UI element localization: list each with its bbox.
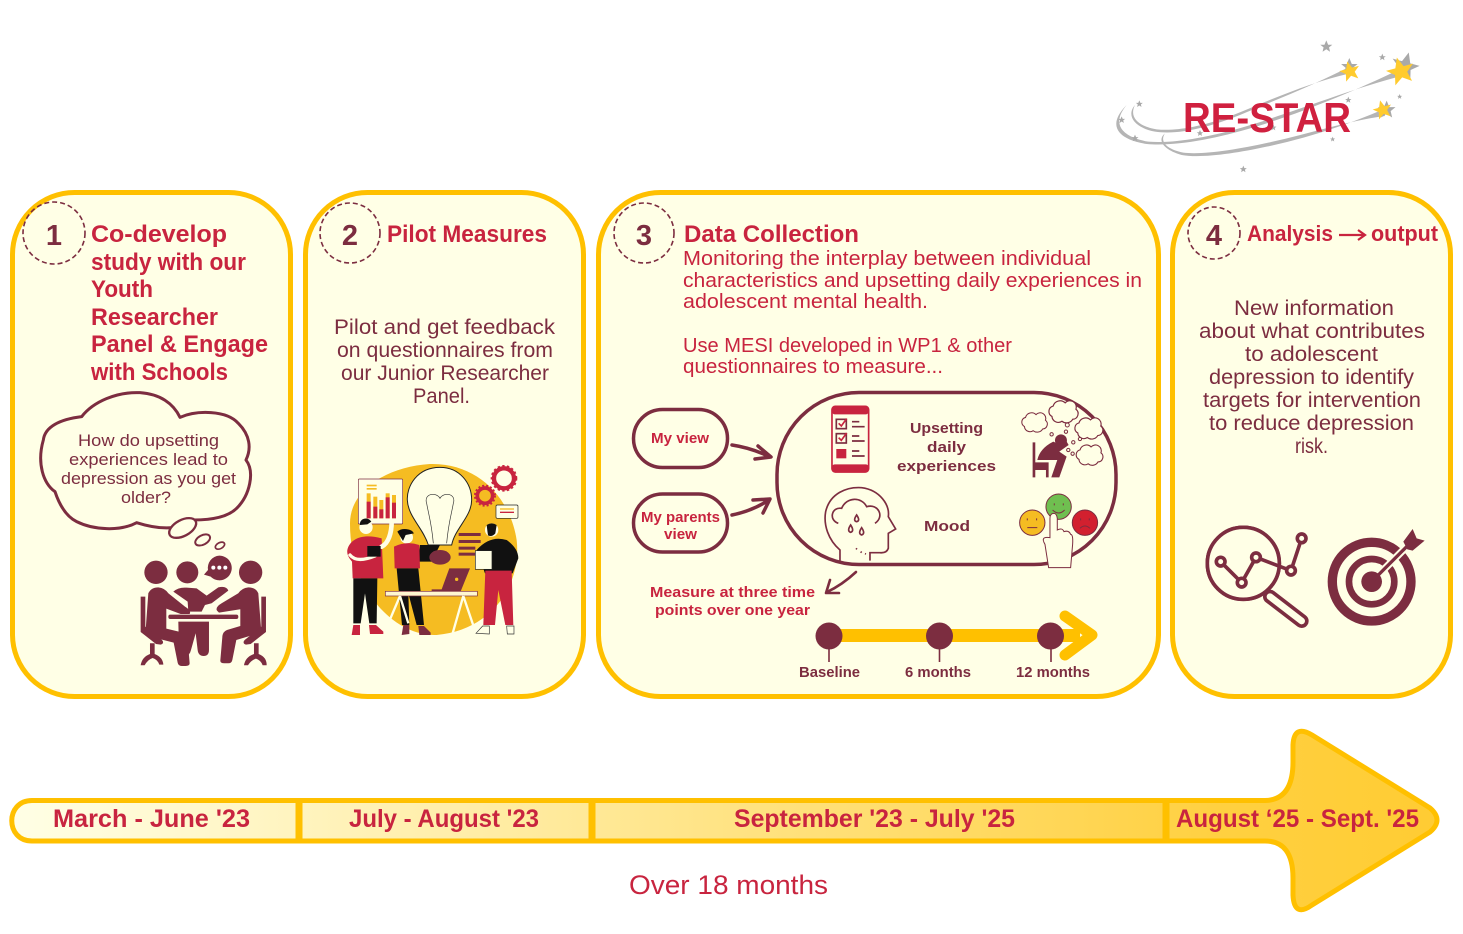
timeline: baseline to 12 months: 12 months — [1016, 664, 1090, 681]
heading: co-develop: study with our — [91, 249, 246, 276]
logo: RE-STAR: RE-STAR — [1183, 94, 1351, 141]
measure at three time points label — [650, 584, 815, 619]
pill: my parents view — [634, 494, 728, 552]
thought bubble — [41, 393, 251, 551]
phase: September '23 - July '25: September '23 - July '25 — [734, 805, 1015, 833]
thought bubble: experiences lead to — [69, 450, 228, 469]
arrow: my view to measures — [732, 445, 771, 459]
heading: co-develop: Youth — [91, 276, 153, 303]
logo: RE-STAR — [1116, 40, 1422, 172]
step number 3 — [614, 203, 674, 263]
pill: my view — [634, 410, 728, 468]
icon: phone checklist — [832, 406, 869, 472]
analysis description: targets for intervention — [1203, 389, 1421, 412]
heading: analysis to output: Analysis — [1247, 221, 1333, 246]
timeline: baseline to 12 months — [799, 616, 1092, 681]
label: mood: Mood — [924, 518, 970, 535]
heading: co-develop: Panel & Engage — [91, 331, 268, 358]
analysis description: risk. — [1295, 435, 1328, 458]
label: upsetting daily experiences: daily — [927, 439, 967, 456]
pill: my parents view: My parents — [641, 509, 720, 526]
heading: co-develop: Co-develop — [91, 221, 227, 248]
data collection description: Monitoring the interplay between individual — [683, 248, 1091, 270]
heading: co-develop — [90, 221, 268, 386]
panel 1: co-develop — [12, 192, 290, 696]
analysis description: New information — [1234, 297, 1394, 320]
data collection description: Use MESI developed in WP1 & other — [683, 335, 1012, 357]
analysis description: depression to identify — [1209, 366, 1415, 389]
icon: magnifier with line chart — [1207, 527, 1306, 621]
analysis description: about what contributes — [1199, 320, 1425, 343]
phase: August '25 - Sept. '25: August ‘25 - Sept. '25 — [1176, 805, 1419, 833]
thought bubble: depression as you get — [61, 469, 236, 488]
pilot description: our Junior Researcher — [341, 362, 549, 385]
heading: analysis to output: output — [1371, 221, 1439, 246]
pilot description: Pilot and get feedback — [334, 316, 556, 339]
step number 1: 1 — [46, 220, 62, 252]
icon: target with arrow — [1332, 529, 1425, 621]
arrow: measures to time points — [826, 572, 856, 593]
arrow: my parents view to measures — [732, 499, 770, 515]
thought bubble: older? — [121, 488, 171, 507]
pill: my parents view: view — [664, 526, 697, 543]
panel 3: data collection — [598, 192, 1158, 696]
thought bubble: How do upsetting — [78, 431, 219, 450]
icon: person worrying with thought clouds — [1022, 401, 1103, 477]
dividers between phases — [299, 800, 1166, 841]
analysis description — [1199, 297, 1425, 458]
phase: March - June '23: March - June '23 — [53, 805, 250, 833]
analysis description: to adolescent — [1245, 343, 1378, 366]
label: upsetting daily experiences: Upsetting — [910, 420, 983, 437]
measure at three time points label: points over one year — [655, 602, 810, 619]
label: upsetting daily experiences — [897, 420, 996, 475]
pilot description: Panel. — [413, 385, 470, 408]
pill: my view: My view — [651, 430, 709, 447]
caption: over 18 months: Over 18 months — [629, 870, 828, 900]
icon: people at table — [141, 556, 267, 666]
illustration: team around light bulb — [347, 464, 518, 635]
panel 4: analysis to output — [1172, 192, 1450, 696]
label: upsetting daily experiences: experiences — [897, 458, 996, 475]
icon: mood faces with pointing hand — [1020, 494, 1098, 568]
heading: pilot measures: Pilot Measures — [387, 221, 547, 248]
measures box — [777, 392, 1116, 568]
timeline arrow — [12, 731, 1437, 910]
measure at three time points label: Measure at three time — [650, 584, 815, 601]
data collection description: characteristics and upsetting daily experiences in — [683, 270, 1142, 292]
step number 3: 3 — [636, 220, 652, 252]
panel 2: pilot measures — [306, 192, 584, 696]
icon: head with rain cloud — [825, 488, 896, 561]
data collection description: questionnaires to measure... — [683, 356, 943, 378]
heading: data collection: Data Collection — [684, 221, 859, 248]
step number 4: 4 — [1206, 220, 1222, 252]
timeline: baseline to 12 months: 6 months — [905, 664, 971, 681]
analysis description: to reduce depression — [1209, 412, 1414, 435]
phase: July - August '23: July - August '23 — [349, 805, 539, 833]
data collection description — [683, 248, 1142, 378]
step number 4 — [1188, 207, 1240, 259]
timeline: baseline to 12 months: Baseline — [799, 664, 860, 681]
heading: analysis to output — [1247, 221, 1439, 246]
step number 2 — [320, 203, 380, 263]
heading: co-develop: Researcher — [91, 304, 218, 331]
heading: co-develop: with Schools — [90, 359, 228, 386]
data collection description: adolescent mental health. — [683, 291, 928, 313]
pilot description: on questionnaires from — [337, 339, 553, 362]
step number 2: 2 — [342, 220, 358, 252]
pilot description — [334, 316, 556, 408]
step number 1 — [23, 202, 85, 264]
